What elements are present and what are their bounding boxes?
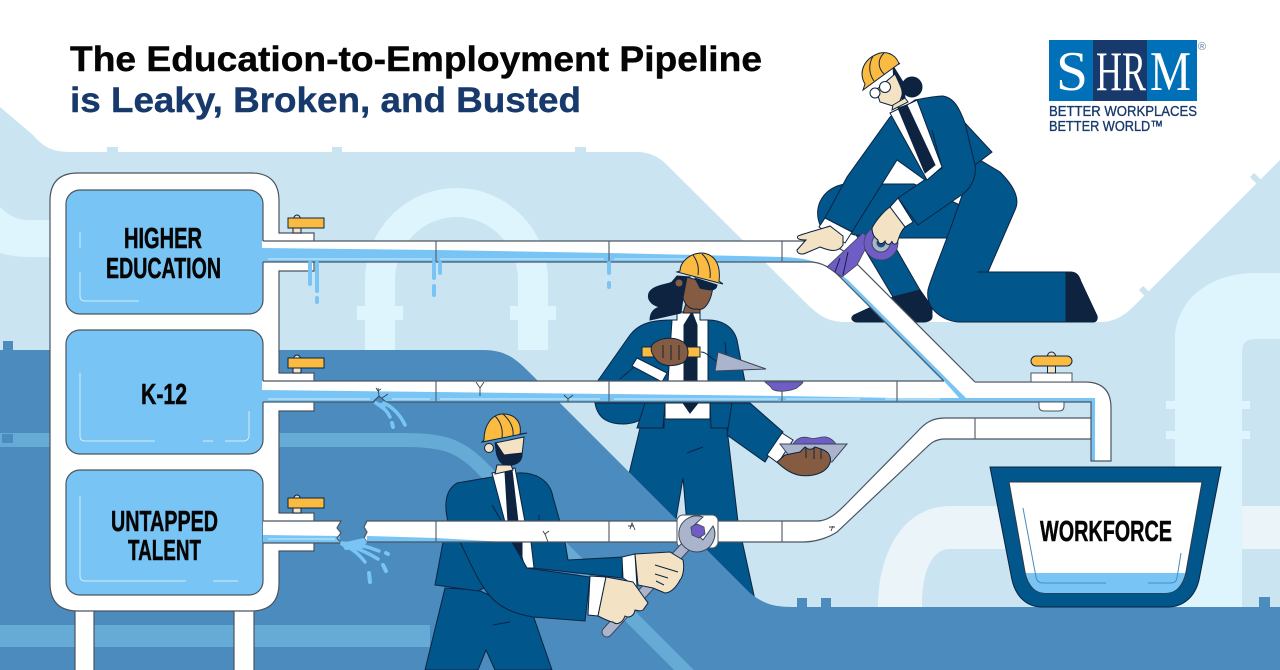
- pipe 3: untapped talent, broken: [263, 418, 1091, 543]
- shutoff valve: K-12: [288, 355, 324, 373]
- SHRM logo: S: [1056, 41, 1088, 103]
- SHRM logo: HR: [1096, 41, 1146, 103]
- SHRM logo: M: [1150, 41, 1191, 103]
- background: mid-blue hill and pale pipes: [0, 341, 1280, 670]
- source box: higher education: EDUCATION: [106, 253, 221, 285]
- tape repair and hands: worker 1: [797, 198, 913, 277]
- wrench and hands: worker 3: [588, 515, 718, 632]
- worker 2 body: woman with trowel and plaster: [595, 312, 847, 600]
- source box: untapped talent: UNTAPPED: [111, 506, 218, 538]
- source box: untapped talent: [66, 470, 263, 595]
- title: The Education-to-Employment Pipeline: [70, 40, 762, 79]
- pipe 2: K-12, cracked, joins outflow: [262, 241, 1111, 461]
- leak: spray from broken talent pipe: [337, 537, 388, 582]
- tank frame with legs: [50, 173, 314, 670]
- outflow valve: [1031, 352, 1072, 411]
- plaster patch on K-12 pipe: [765, 382, 803, 391]
- source box: higher education: [66, 190, 263, 314]
- worker 2 head: [648, 253, 723, 320]
- shutoff valve: higher education: [288, 215, 324, 233]
- SHRM logo: BETTER WORKPLACES: [1049, 103, 1197, 120]
- worker 1 body: kneeling woman with tape: [818, 53, 1097, 322]
- SHRM logo: [1049, 40, 1206, 135]
- worker 3 body: man with wrench: [425, 414, 623, 670]
- shutoff valve: untapped talent: [288, 495, 324, 513]
- workforce bucket: [990, 467, 1221, 607]
- leak: spray from K-12 pipe crack: [373, 403, 405, 427]
- pipe 1: higher education, leaky: [262, 241, 975, 399]
- source box: K-12: K-12: [141, 379, 187, 411]
- title: is Leaky, Broken, and Busted: [70, 81, 581, 120]
- source box: higher education: HIGHER: [124, 223, 202, 255]
- title: [70, 40, 762, 120]
- SHRM logo: BETTER WORLD™: [1049, 118, 1163, 135]
- SHRM logo: ®: [1198, 41, 1206, 53]
- source box: untapped talent: TALENT: [128, 535, 201, 567]
- workforce bucket: WORKFORCE: [1040, 516, 1172, 548]
- source box: K-12: [66, 330, 263, 454]
- leaks: drips from pipe 1: [310, 263, 609, 302]
